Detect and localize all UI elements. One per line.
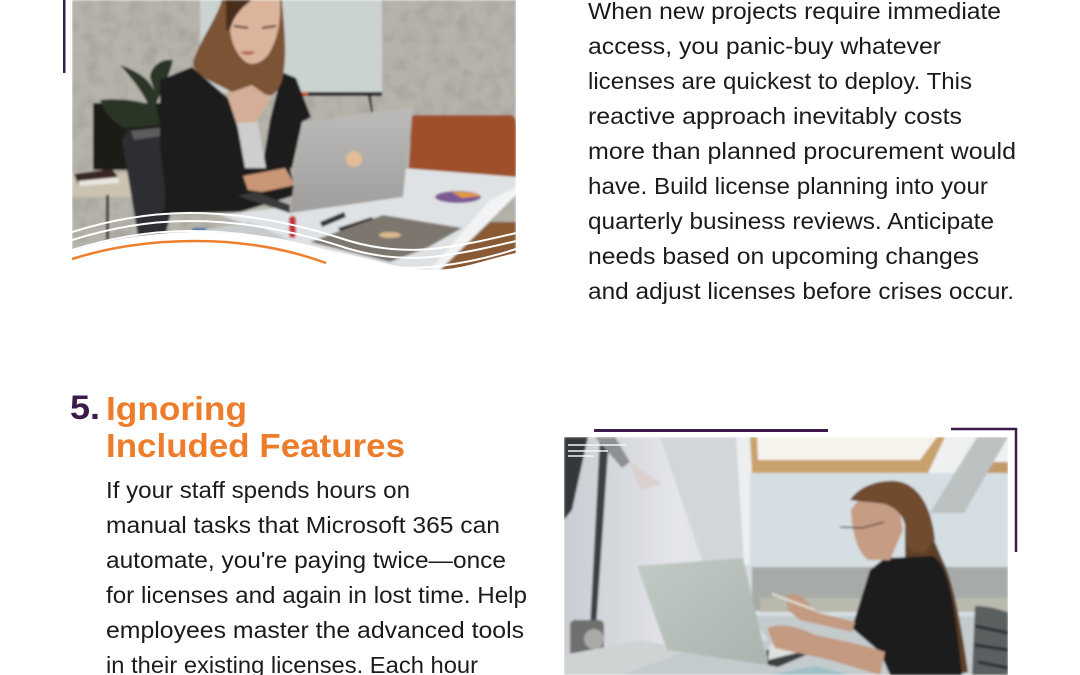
orange wave accent under photo	[72, 241, 326, 263]
heading: Ignoring Included Features	[106, 390, 405, 464]
photo: woman in blazer working on laptop	[72, 0, 516, 270]
text block: left column paragraph	[106, 477, 527, 675]
white decorative stripes on photo corner	[568, 445, 626, 456]
hair behind back	[904, 526, 969, 674]
text block: left column paragraph: employees master the advanced tools	[106, 617, 524, 643]
shirt	[852, 556, 962, 675]
section number 5: 5.	[70, 389, 100, 427]
jacket	[160, 67, 296, 214]
purple accent bar beside top photo	[63, 0, 66, 73]
text block: right column paragraph: quarterly business reviews. Anticipate	[588, 208, 994, 234]
text block: right column paragraph	[588, 0, 1016, 304]
text block: right column paragraph: needs based on upcoming changes	[588, 243, 979, 269]
hair and face	[193, 0, 285, 95]
heading: Ignoring Included Features: Ignoring	[106, 390, 247, 427]
purple accent line above photo	[594, 429, 828, 432]
text block: left column paragraph: If your staff spends hours on	[106, 477, 410, 503]
head	[851, 492, 903, 560]
text block: right column paragraph: reactive approach inevitably costs	[588, 103, 962, 129]
text block: right column paragraph: access, you panic-buy whatever	[588, 33, 941, 59]
text block: right column paragraph: and adjust licenses before crises occur.	[588, 278, 1014, 304]
text block: right column paragraph: have. Build license planning into your	[588, 173, 988, 199]
text block: left column paragraph: manual tasks that Microsoft 365 can	[106, 512, 500, 538]
white wave stripes over photo	[72, 213, 516, 268]
hands and laptops	[243, 168, 295, 192]
heading: Ignoring Included Features: Included Features	[106, 427, 405, 464]
text block: left column paragraph: automate, you're paying twice—once	[106, 547, 506, 573]
arms	[767, 626, 885, 675]
text block: left column paragraph: for licenses and again in lost time. Help	[106, 582, 527, 608]
purple corner bracket at photo top right	[951, 429, 1016, 552]
chair frame	[122, 127, 176, 236]
text block: right column paragraph: licenses are quickest to deploy. This	[588, 68, 972, 94]
text block: right column paragraph: more than planned procurement would	[588, 138, 1016, 164]
photo: woman with glasses at laptop in attic office	[564, 437, 1008, 675]
